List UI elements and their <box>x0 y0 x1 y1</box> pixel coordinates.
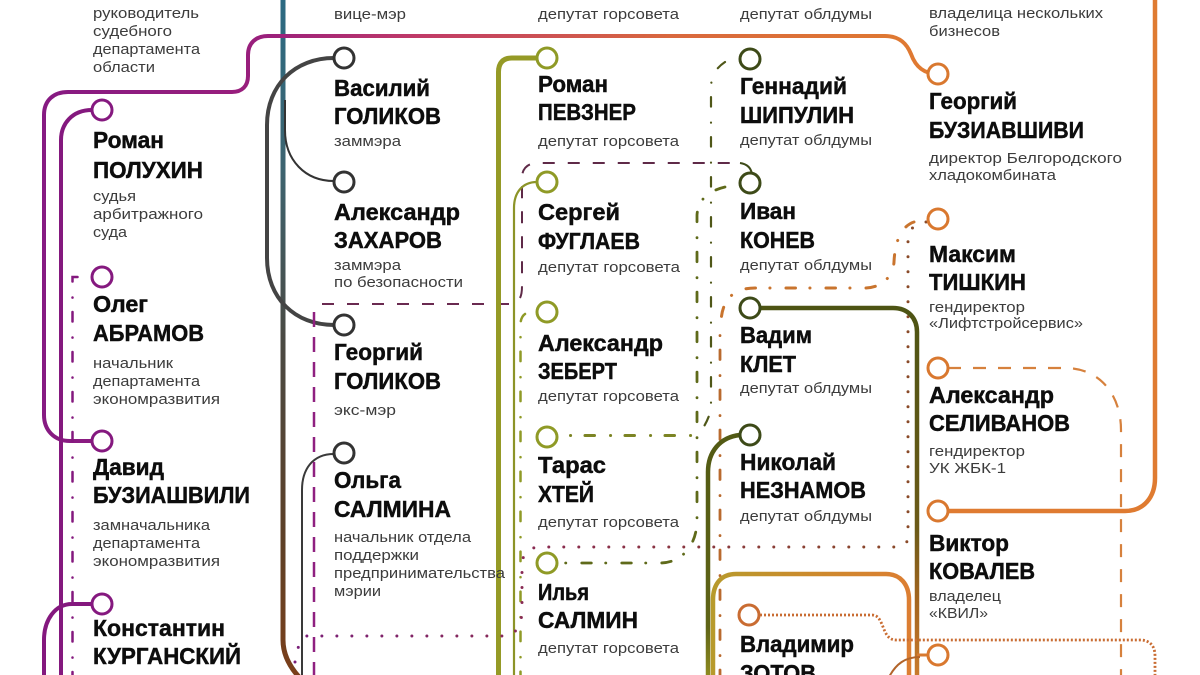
line: dark hook to Ivan Konev <box>740 163 752 174</box>
name <box>538 579 638 633</box>
station <box>334 443 354 463</box>
name <box>538 71 636 125</box>
name: Роман <box>93 127 164 153</box>
role: депутат горсовета <box>538 515 680 531</box>
role <box>334 530 506 600</box>
role: заммэра <box>334 134 402 150</box>
role: предпринимательства <box>334 566 506 582</box>
name: Александр <box>334 199 460 225</box>
role: гендиректор <box>929 444 1025 460</box>
name: СЕЛИВАНОВ <box>929 410 1070 436</box>
name: САЛМИНА <box>334 496 451 522</box>
name <box>929 88 1084 143</box>
person: Konstantin Kurgansky <box>92 594 241 669</box>
role <box>929 151 1122 184</box>
name: Василий <box>334 75 430 101</box>
name <box>93 454 250 508</box>
role: депутат облдумы <box>740 381 872 397</box>
person: Roman Pevzner <box>537 48 680 150</box>
person: Oleg Abramov <box>92 267 220 408</box>
name: НЕЗНАМОВ <box>740 477 866 503</box>
line: olive dash-dot Ivan Konev to Ilya <box>558 187 725 563</box>
line: dotted Maxim to lower left <box>293 222 926 675</box>
person: Georgy Buziashvili <box>928 64 1122 184</box>
line: thin dark arc to Zakharov <box>285 100 334 181</box>
station <box>537 427 557 447</box>
station <box>928 358 948 378</box>
name <box>93 615 241 669</box>
name: Виктор <box>929 530 1009 556</box>
line: olive dash-dot Zebert <box>520 314 525 675</box>
role: экономразвития <box>93 392 220 408</box>
role: депутат облдумы <box>740 258 872 274</box>
role of cropped person: судебного <box>93 24 172 40</box>
station <box>928 209 948 229</box>
name <box>93 291 204 346</box>
name: ГОЛИКОВ <box>334 368 441 394</box>
name <box>929 241 1026 295</box>
role: гендиректор <box>929 300 1025 316</box>
line: thin dark Salmina <box>302 454 334 675</box>
station <box>92 100 112 120</box>
name <box>334 339 441 394</box>
name: САЛМИН <box>538 607 638 633</box>
name: БУЗИАШВИЛИ <box>93 482 250 508</box>
name: ПОЛУХИН <box>93 157 203 183</box>
person: Sergey Fuglaev <box>537 172 681 276</box>
person: Alexander Zakharov <box>334 172 463 291</box>
role: по безопасности <box>334 275 463 291</box>
station <box>740 173 760 193</box>
station <box>334 48 354 68</box>
person: Maxim Tishkin <box>928 209 1083 332</box>
name: Александр <box>538 330 663 356</box>
person: Roman Polukhin and preceding role <box>92 6 203 241</box>
line: dark grey arc Vasily to Georgy Golikov <box>267 58 334 325</box>
name: КЛЕТ <box>740 351 796 377</box>
name <box>740 198 815 253</box>
station <box>740 425 760 445</box>
person: Nikolay Neznamov <box>740 425 872 525</box>
role: vice-mayor (cropped person): вице-мэр <box>334 7 406 23</box>
role: city council deputy (cropped person): депутат горсовета <box>538 7 680 23</box>
person: Olga Salmina <box>334 443 506 600</box>
name: Ольга <box>334 467 401 493</box>
role: мэрии <box>334 584 381 600</box>
name <box>538 330 663 384</box>
name <box>740 631 854 675</box>
line: dark olive dash-dot Shipulin <box>703 62 725 428</box>
name <box>538 199 640 254</box>
name <box>334 75 441 129</box>
name: Константин <box>93 615 225 641</box>
line: orange dash-dot Tishkin vertical <box>719 330 721 675</box>
person: David Buziashvili <box>92 431 250 570</box>
role: депутат горсовета <box>538 134 680 150</box>
name: Владимир <box>740 631 854 657</box>
person: Alexander Zebert <box>537 302 680 405</box>
name: ФУГЛАЕВ <box>538 228 640 254</box>
name: ШИПУЛИН <box>740 102 854 128</box>
station <box>740 49 760 69</box>
role: экс-мэр <box>334 403 396 419</box>
role: «КВИЛ» <box>929 606 988 622</box>
role: судья <box>93 189 136 205</box>
station <box>928 501 948 521</box>
role <box>929 589 1001 622</box>
name: ЗЕБЕРТ <box>538 358 617 384</box>
role: депутат горсовета <box>538 641 680 657</box>
name: БУЗИАВШИВИ <box>929 117 1084 143</box>
role: business owner (cropped person): владелица нескольких <box>929 6 1104 22</box>
line: thin brown arc at bottom <box>889 657 920 675</box>
role: департамента <box>93 374 201 390</box>
name: ПЕВЗНЕР <box>538 99 636 125</box>
name: ГОЛИКОВ <box>334 103 441 129</box>
name: КОНЕВ <box>740 227 815 253</box>
role: депутат горсовета <box>538 389 680 405</box>
station <box>740 298 760 318</box>
line: dark olive thick Klet <box>760 308 917 675</box>
name: АБРАМОВ <box>93 320 204 346</box>
name <box>740 73 854 128</box>
line: magenta dashed vertical <box>313 312 315 675</box>
role: владелец <box>929 589 1001 605</box>
name <box>334 199 460 253</box>
role <box>929 300 1083 332</box>
name <box>740 322 812 377</box>
line: maroon dashed frame <box>520 163 730 298</box>
person: Ilya Salmin <box>537 553 680 657</box>
person: Vadim Klet <box>740 298 872 397</box>
name: КУРГАНСКИЙ <box>93 642 241 669</box>
role: депутат горсовета <box>538 260 681 276</box>
role: суда <box>93 225 128 241</box>
role <box>93 518 220 570</box>
person: Vladimir Zotov <box>739 605 854 675</box>
station <box>92 267 112 287</box>
station <box>92 431 112 451</box>
station <box>928 64 948 84</box>
role: департамента <box>93 536 201 552</box>
role: директор Белгородского <box>929 151 1122 167</box>
role: поддержки <box>334 548 419 564</box>
line: olive thin Fuglaev <box>514 182 537 675</box>
name: Александр <box>929 382 1054 408</box>
name: Тарас <box>538 452 606 478</box>
role of cropped person: области <box>93 60 155 76</box>
person: Taras Khtey <box>537 427 680 531</box>
line: purple Kurgansky <box>44 604 102 675</box>
person: Georgy Golikov <box>334 315 441 419</box>
name: ЗАХАРОВ <box>334 227 442 253</box>
role of cropped person: руководитель <box>93 6 199 22</box>
name: КОВАЛЕВ <box>929 558 1035 584</box>
station <box>537 302 557 322</box>
role <box>93 356 220 408</box>
name: Давид <box>93 454 164 480</box>
role <box>334 258 463 291</box>
role: regional duma deputy (cropped person): депутат облдумы <box>740 7 872 23</box>
role of cropped person <box>93 6 201 76</box>
role <box>93 189 203 241</box>
role: депутат облдумы <box>740 509 872 525</box>
line: purple-to-orange main <box>44 36 938 441</box>
line: dense dotted orange Zotov <box>760 615 1155 675</box>
station <box>334 172 354 192</box>
line: purple Polukhin <box>61 110 102 675</box>
role: business owner (cropped person): бизнесов <box>929 24 1000 40</box>
name: Георгий <box>334 339 423 365</box>
person: Vasily Golikov <box>334 48 441 150</box>
station <box>537 553 557 573</box>
role: замначальника <box>93 518 211 534</box>
role of cropped person: департамента <box>93 42 201 58</box>
name <box>929 382 1070 436</box>
role: арбитражного <box>93 207 203 223</box>
line: gold-orange rounded frame <box>713 574 909 675</box>
name: ХТЕЙ <box>538 480 594 507</box>
name <box>929 530 1035 584</box>
name: ТИШКИН <box>929 269 1026 295</box>
name: Сергей <box>538 199 620 225</box>
role: заммэра <box>334 258 402 274</box>
name: Олег <box>93 291 148 317</box>
name: Иван <box>740 198 796 224</box>
station <box>537 48 557 68</box>
person: Gennady Shipulin <box>740 49 872 149</box>
station: lower right <box>928 645 948 665</box>
line: olive thick Neznamov <box>708 435 740 675</box>
role: УК ЖБК-1 <box>929 461 1006 477</box>
role: хладокомбината <box>929 168 1057 184</box>
name <box>740 449 866 503</box>
role <box>929 444 1025 477</box>
name: Максим <box>929 241 1016 267</box>
role: начальник отдела <box>334 530 472 546</box>
line: blue-brown trunk <box>283 0 299 675</box>
line: orange connector to lower station <box>917 654 930 656</box>
person: Alexander Selivanov <box>928 358 1070 477</box>
role: «Лифтстройсервис» <box>929 316 1083 332</box>
line: orange thick Kovalev <box>948 0 1155 511</box>
role: начальник <box>93 356 174 372</box>
line: maroon dashed horizontal <box>322 303 512 305</box>
station <box>92 594 112 614</box>
name <box>538 452 606 507</box>
role: экономразвития <box>93 554 220 570</box>
name <box>334 467 451 522</box>
person: Ivan Konev <box>740 173 872 274</box>
name: Геннадий <box>740 73 847 99</box>
name: Николай <box>740 449 836 475</box>
station <box>739 605 759 625</box>
line: orange dashed Selivanov <box>948 368 1121 675</box>
name <box>93 127 203 183</box>
line: purple dash-dot Abramov <box>72 277 80 675</box>
name: Вадим <box>740 322 812 348</box>
station <box>334 315 354 335</box>
station <box>537 172 557 192</box>
role: business owner (cropped person) <box>929 6 1104 40</box>
name: Роман <box>538 71 608 97</box>
line: olive thick Pevzner <box>498 58 537 675</box>
role: депутат облдумы <box>740 133 872 149</box>
name: Георгий <box>929 88 1017 114</box>
line: olive dash-dot Taras <box>545 434 695 437</box>
line: orange dash-dot Tishkin upper <box>721 222 914 322</box>
name: Илья <box>538 579 589 605</box>
person: Viktor Kovalev <box>928 501 1035 622</box>
